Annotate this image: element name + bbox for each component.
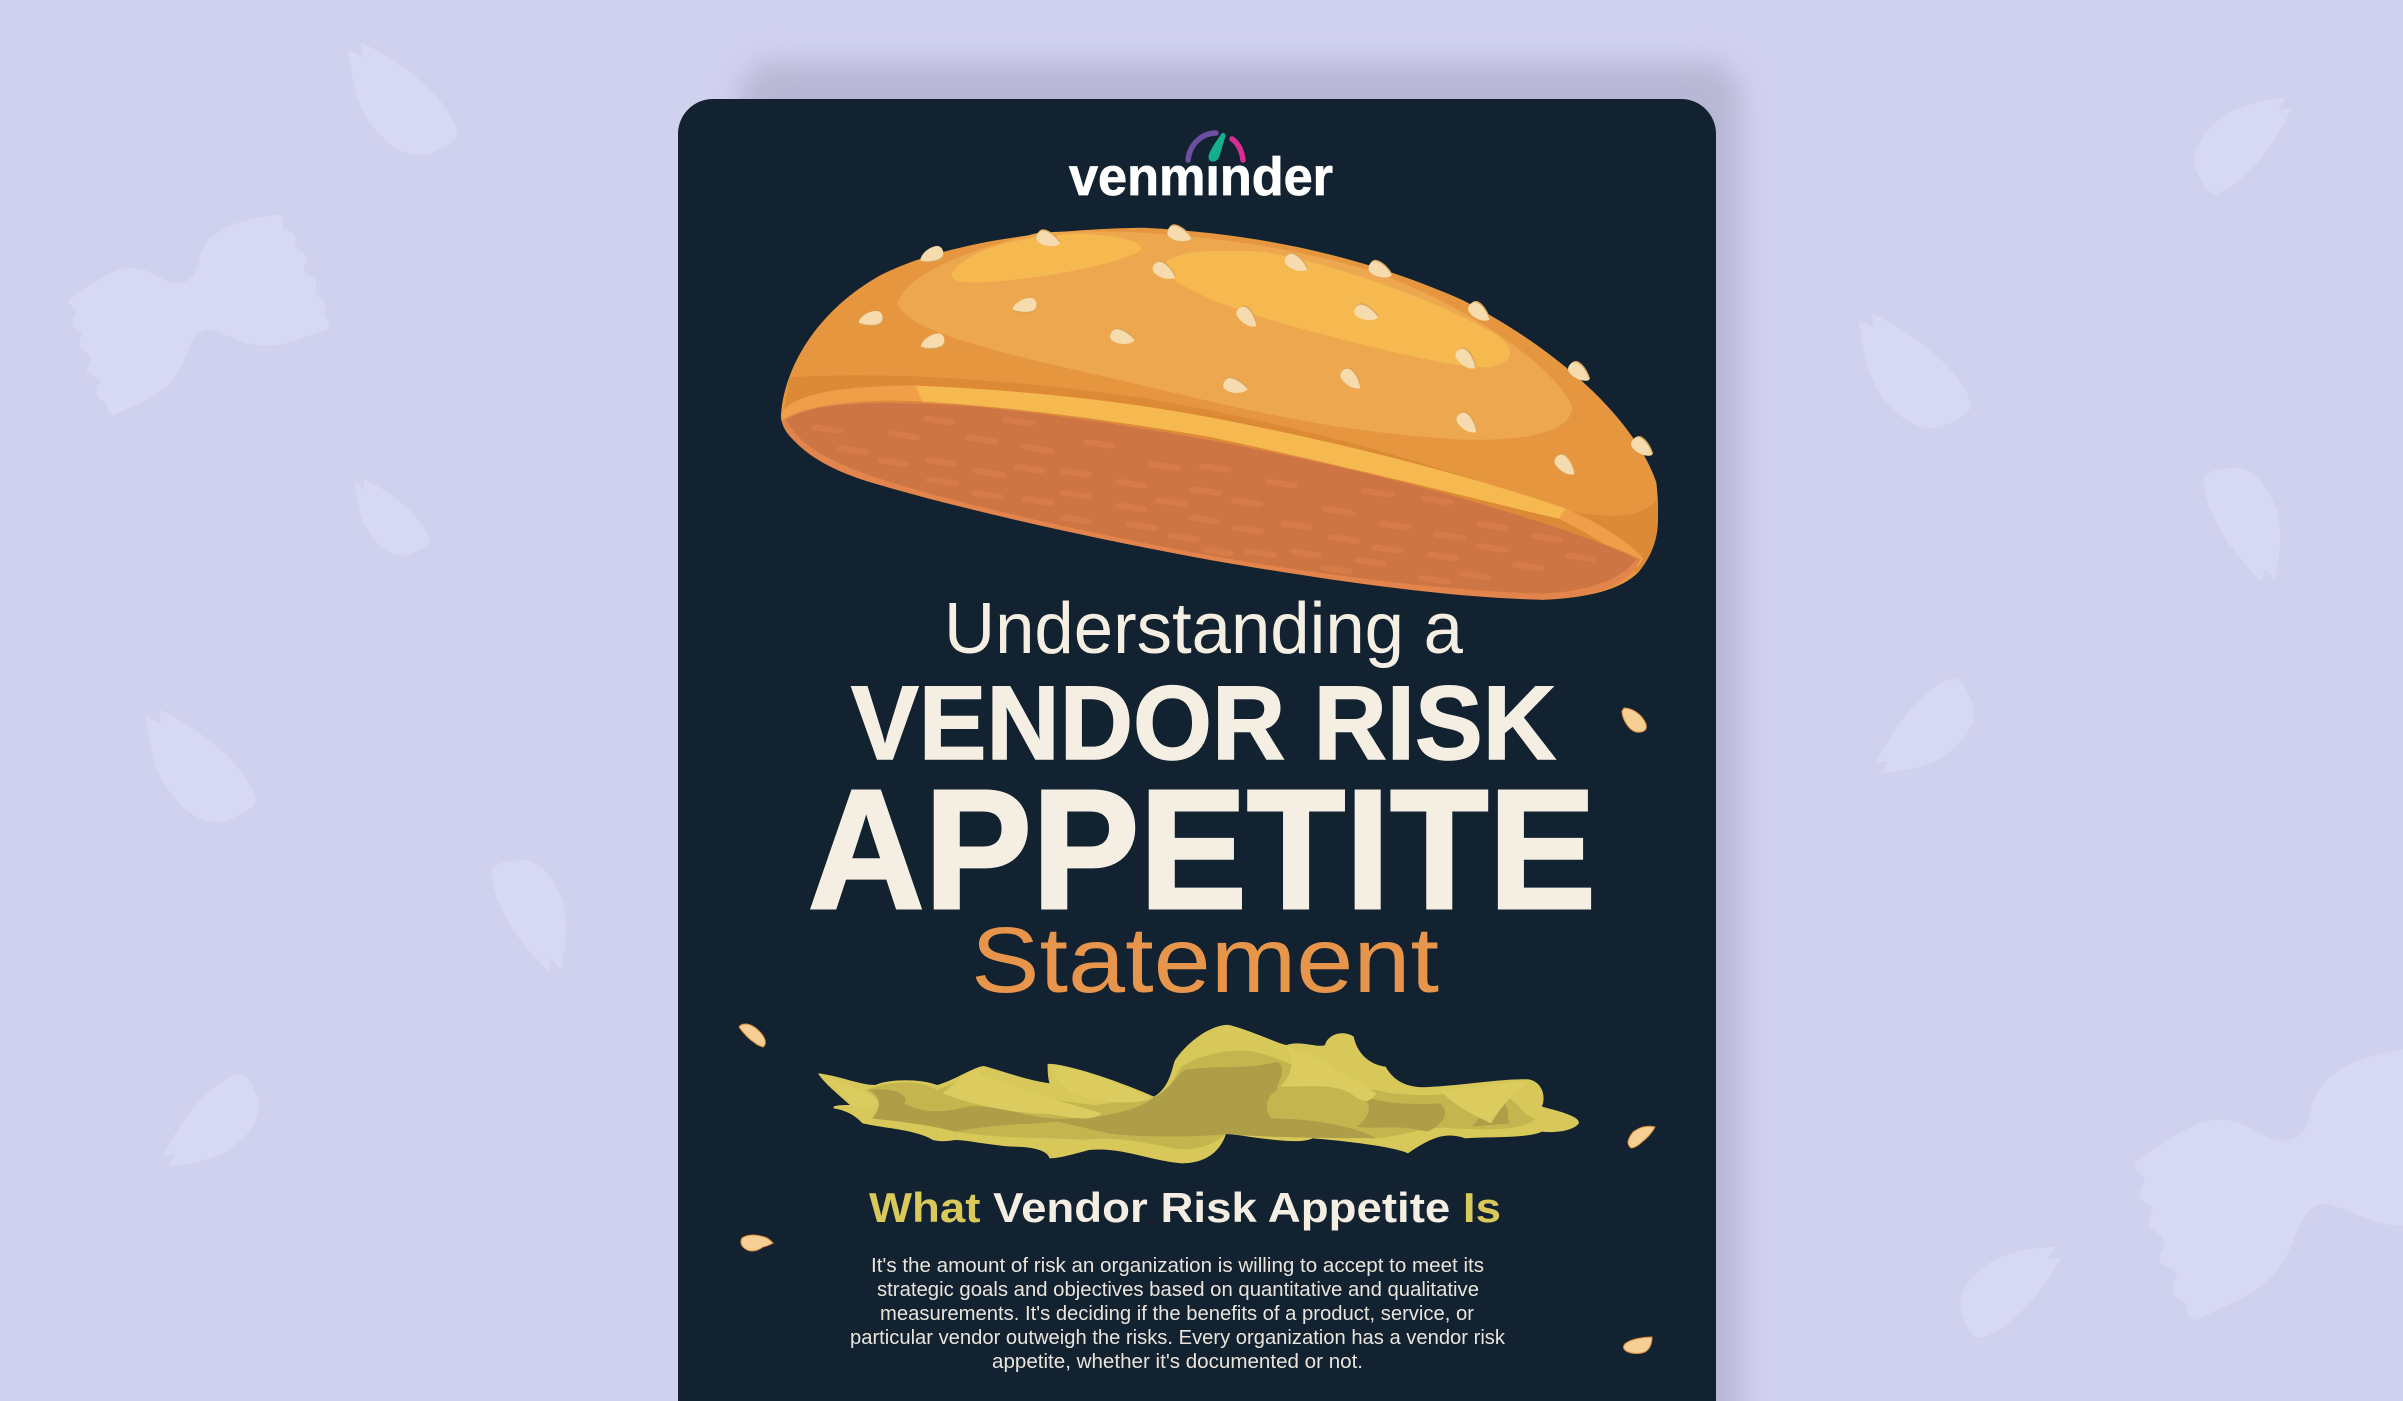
- lettuce base: [818, 1025, 1579, 1163]
- seed right middle: [1628, 1126, 1655, 1148]
- logo wordmark: venminder: [1069, 147, 1333, 207]
- title line: APPETITE: APPETITE: [808, 755, 1596, 945]
- crumb texture: [817, 419, 1591, 581]
- title: [808, 589, 1596, 1012]
- crust band right: [1559, 508, 1643, 567]
- lettuce mid folds: [866, 1051, 1536, 1149]
- cut face: [786, 403, 1636, 594]
- title line: Understanding a: Understanding a: [944, 589, 1464, 669]
- seed left upper: [739, 1024, 765, 1047]
- bun highlight: [898, 231, 1572, 440]
- body text: particular vendor outweigh the risks. Every organization has a vendor risk: [850, 1327, 1506, 1349]
- icon: gauge: [1188, 132, 1243, 162]
- logo: [1069, 132, 1333, 207]
- title line: Statement: Statement: [971, 908, 1439, 1012]
- body text: [850, 1255, 1506, 1373]
- body text: measurements. It's deciding if the benefits of a product, service, or: [880, 1303, 1474, 1325]
- bun shine right: [1164, 251, 1510, 367]
- subheading: What Vendor Risk Appetite Is: [869, 1184, 1501, 1231]
- body text: strategic goals and objectives based on quantitative and qualitative: [877, 1279, 1479, 1301]
- body text: appetite, whether it's documented or not.: [992, 1351, 1363, 1373]
- card shadow: [740, 62, 1740, 1401]
- crust band yellow: [915, 385, 1566, 519]
- bun shine left: [952, 234, 1141, 282]
- bun dome: [781, 228, 1658, 600]
- seed top right: [1622, 708, 1646, 732]
- loose seeds: [739, 708, 1655, 1354]
- pasta bow left: [69, 214, 330, 415]
- lettuce light folds: [821, 1047, 1529, 1123]
- lettuce illustration: [818, 1025, 1579, 1163]
- seed left lower: [741, 1235, 773, 1251]
- bun rim shade: [783, 375, 1658, 572]
- cut face rim: [781, 402, 1640, 600]
- crust band left: [781, 385, 924, 421]
- seed right lower: [1624, 1337, 1652, 1354]
- lettuce dark folds: [869, 1062, 1510, 1138]
- title line: VENDOR RISK: VENDOR RISK: [851, 665, 1556, 782]
- pasta bow right: [2135, 1047, 2403, 1320]
- card panel: [678, 99, 1716, 1401]
- bun illustration: [781, 228, 1658, 600]
- body text: It's the amount of risk an organization is willing to accept to meet its: [871, 1255, 1484, 1277]
- sesame seeds on bun: [857, 222, 1657, 479]
